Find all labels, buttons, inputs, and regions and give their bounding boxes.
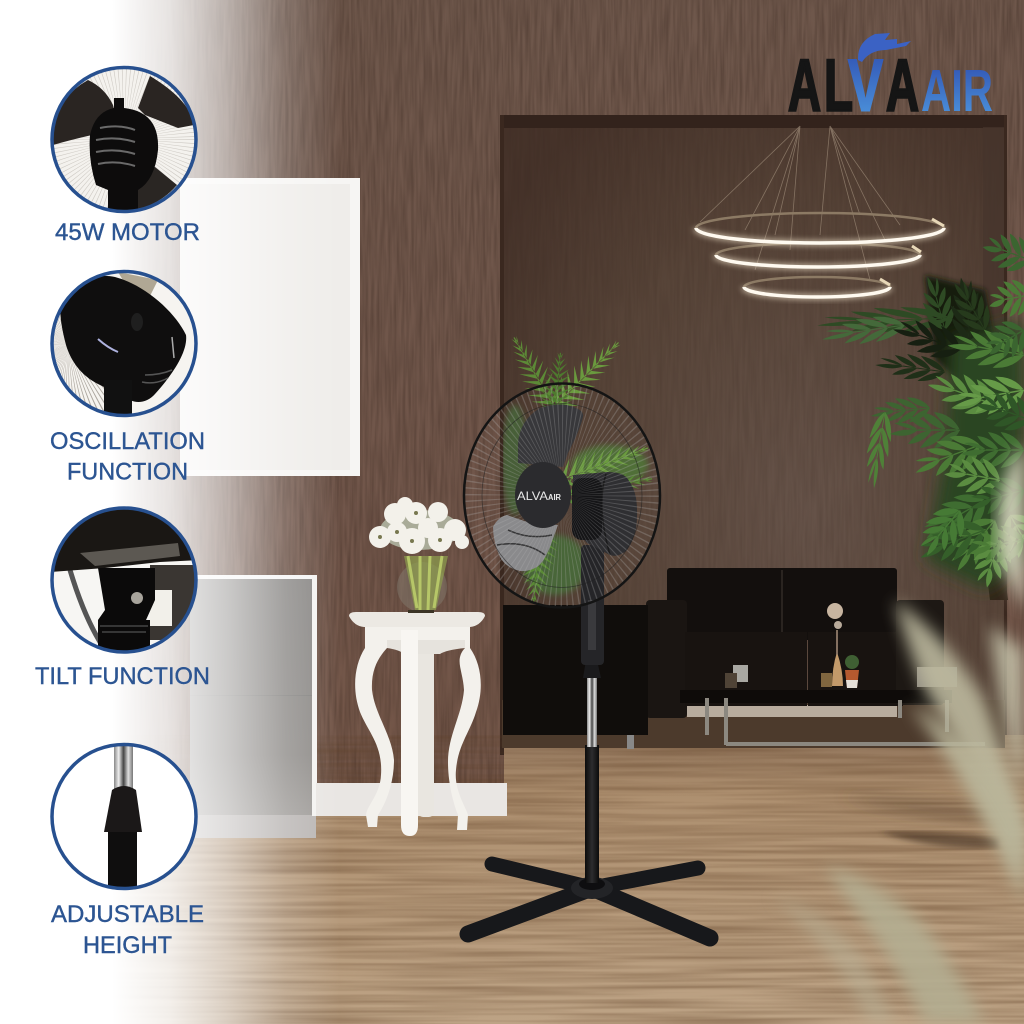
plant: large right palm [817, 226, 1024, 600]
fan hub with logo [515, 462, 571, 528]
logo word ALVA: V [848, 46, 883, 126]
white cabinet and baseboard [190, 575, 507, 838]
left white fade overlay [0, 0, 340, 1024]
label: FUNCTION [67, 458, 188, 486]
plant: palm behind fan [499, 329, 655, 604]
vase and stems [397, 556, 448, 613]
brand logo [788, 33, 993, 126]
fan hub with logo: ALVA [517, 489, 548, 503]
flowers [369, 497, 469, 554]
logo word ALVA: L [824, 46, 853, 126]
logo wing [858, 33, 911, 62]
fan base [468, 864, 710, 938]
foreground blurred grass [772, 445, 1024, 1024]
label [51, 901, 204, 959]
photo: tilt joint [54, 510, 194, 650]
side table with flowers [349, 497, 485, 836]
photo: motor [54, 69, 194, 210]
photo: height collar [104, 746, 194, 887]
label: TILT FUNCTION [35, 663, 210, 690]
fan grille [464, 384, 660, 608]
feature: 45W motor [50, 66, 200, 246]
fan blades [493, 404, 637, 571]
logo word ALVA: A [788, 46, 821, 126]
wall panel: white frame [180, 178, 360, 476]
feature: adjustable height [50, 743, 204, 959]
label: ADJUSTABLE [51, 901, 204, 928]
label: HEIGHT [83, 932, 172, 959]
feature: tilt function [35, 506, 210, 690]
label: 45W MOTOR [55, 219, 200, 246]
product: stand fan [464, 384, 710, 938]
fan pole [581, 545, 604, 883]
feature: oscillation function [50, 270, 204, 480]
photo: motor rear [54, 273, 194, 414]
table decor [725, 603, 957, 688]
sofa and coffee table [503, 568, 985, 749]
logo word ALVA [788, 46, 919, 126]
label [50, 428, 205, 486]
logo word AIR: AIR [921, 58, 993, 124]
chandelier [696, 126, 944, 297]
label: OSCILLATION [50, 428, 205, 455]
floor: wooden planks [0, 700, 1024, 1024]
fan hub with logo: AIR [548, 493, 561, 502]
logo word ALVA: A [886, 46, 919, 126]
